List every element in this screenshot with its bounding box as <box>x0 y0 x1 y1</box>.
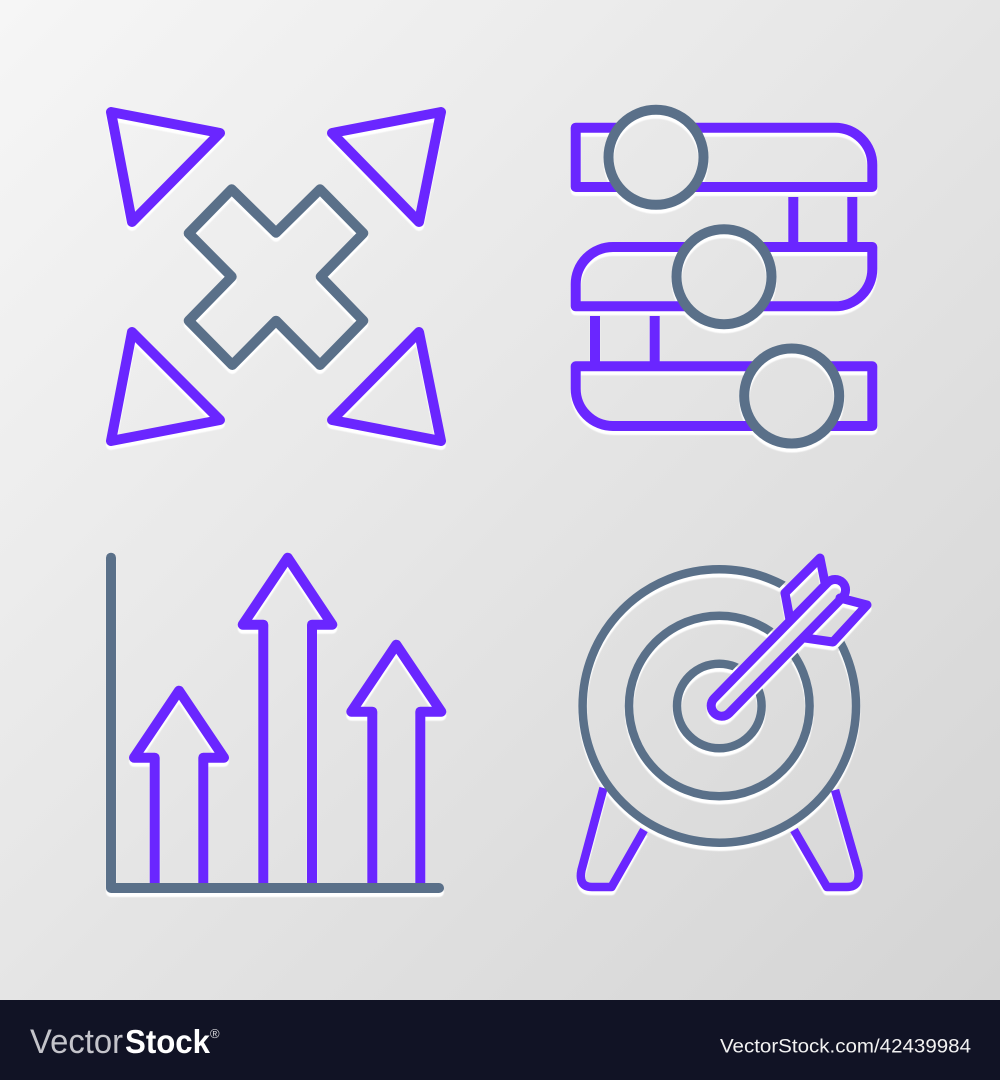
triangle top-right <box>332 112 441 222</box>
slider knobs <box>608 110 839 444</box>
triangle bottom-right <box>332 332 441 441</box>
icon: sliders <box>576 110 872 444</box>
chart axes <box>111 558 439 888</box>
arrow short <box>134 691 224 885</box>
footer image id: VectorStock.com/42439984 <box>720 1037 971 1058</box>
target rings <box>583 569 856 843</box>
footer bar <box>0 1000 1000 1080</box>
icon: growth chart with arrows <box>111 558 441 888</box>
slider tracks <box>576 128 872 426</box>
logo word: Stock: Stock <box>125 1023 211 1060</box>
arrow shaft <box>707 575 850 721</box>
arrow medium <box>351 645 441 885</box>
target legs <box>581 788 859 887</box>
logo word: Vector: Vector <box>30 1023 123 1061</box>
arrow fletching <box>785 558 867 642</box>
registered mark: ® <box>210 1026 220 1041</box>
icon: target with arrow <box>581 558 867 887</box>
footer logo <box>30 1023 220 1061</box>
arrow tall <box>243 558 332 885</box>
triangle top-left <box>111 112 220 222</box>
cross shape <box>189 189 363 365</box>
triangle bottom-left <box>111 332 220 441</box>
icon: expand arrows with cross <box>111 112 441 441</box>
